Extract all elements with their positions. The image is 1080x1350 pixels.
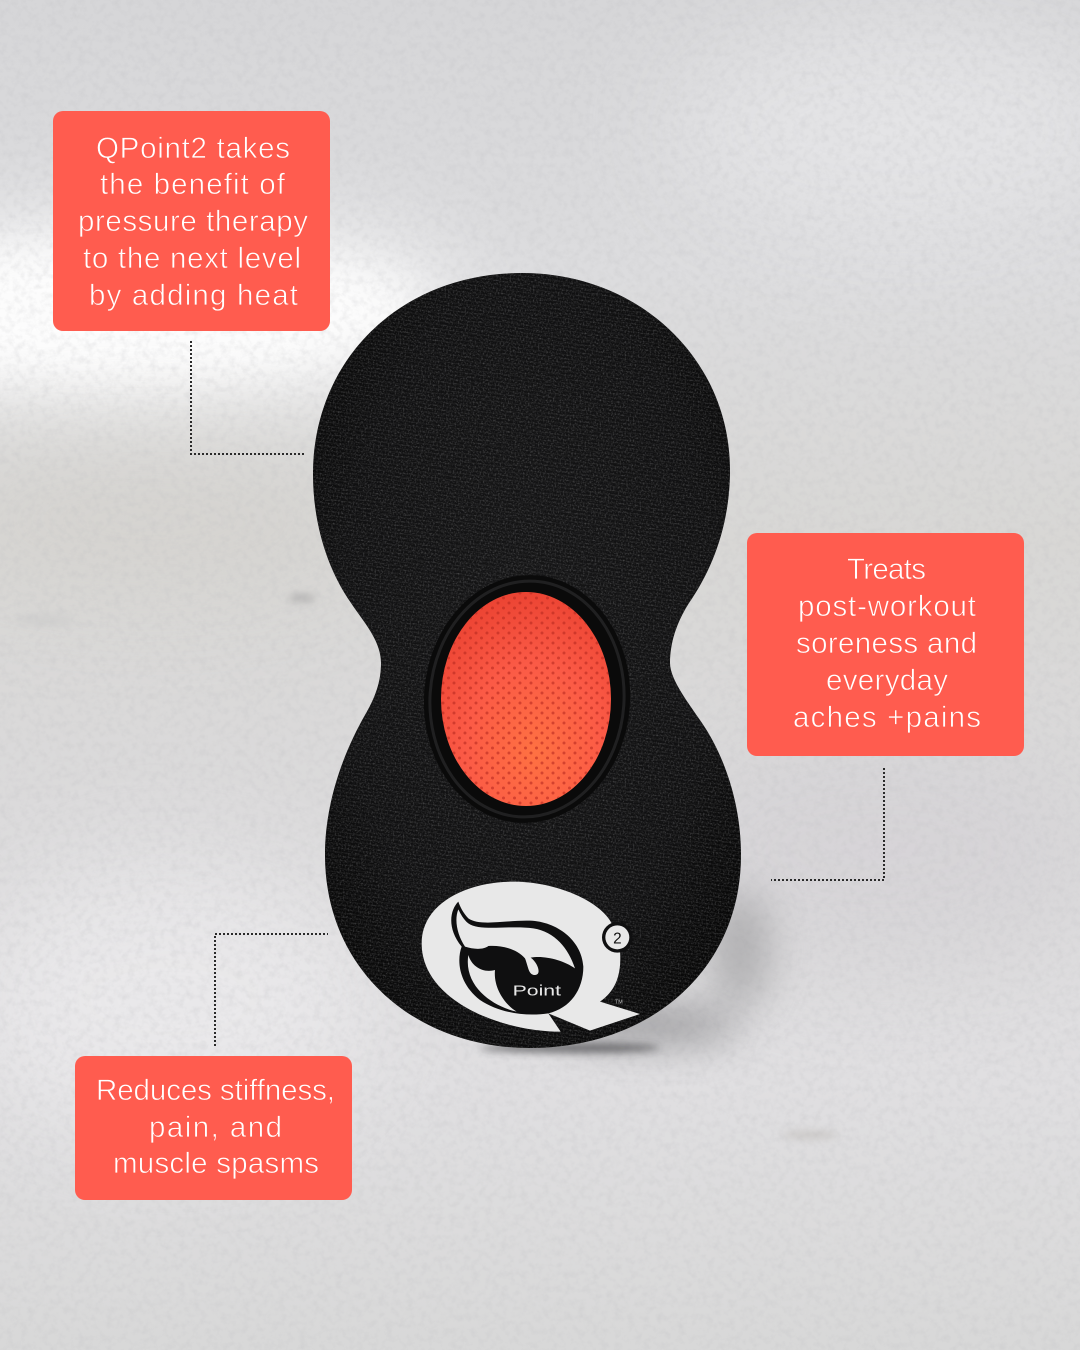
callout: pressure therapy with heat: the benefit of xyxy=(100,168,286,201)
callout: reduces stiffness: muscle spasms xyxy=(113,1147,319,1180)
logo Q shape xyxy=(422,882,640,1032)
callout: treats soreness xyxy=(747,533,1024,756)
connector: right callout to ball xyxy=(771,768,884,880)
callout: treats soreness: Treats xyxy=(847,553,926,586)
product: black peanut massage ball xyxy=(300,260,760,1060)
callout: treats soreness: everyday xyxy=(826,664,948,697)
connector: bottom-left callout to ball xyxy=(215,934,328,1046)
heat pad rim xyxy=(416,568,638,830)
callout: pressure therapy with heat: pressure therapy xyxy=(78,205,308,238)
connector: top-left callout to ball xyxy=(191,341,304,454)
callout: reduces stiffness xyxy=(75,1056,352,1200)
callout: reduces stiffness: pain, and xyxy=(149,1111,282,1144)
callout: treats soreness: aches +pains xyxy=(793,701,981,734)
callout: pressure therapy with heat: by adding heat xyxy=(89,279,298,312)
logo upper flame xyxy=(456,909,575,975)
callout: pressure therapy with heat: QPoint2 takes xyxy=(96,132,290,165)
callout: treats soreness: soreness and xyxy=(796,627,977,660)
QPoint logo xyxy=(422,882,640,1032)
callout: pressure therapy with heat: to the next level xyxy=(83,242,301,275)
logo inner black flame field xyxy=(451,902,583,1015)
callout: reduces stiffness: Reduces stiffness, xyxy=(96,1074,335,1107)
red mesh heat pad xyxy=(441,592,611,806)
ball shadow xyxy=(480,890,770,1053)
logo squared badge: 2 xyxy=(613,930,622,947)
ball body xyxy=(300,260,760,1060)
callout: pressure therapy with heat xyxy=(53,111,330,331)
logo wordmark: Point xyxy=(513,984,561,1000)
callout: treats soreness: post-workout xyxy=(798,590,976,623)
logo trademark: TM xyxy=(615,999,623,1005)
logo squared badge xyxy=(602,922,633,953)
logo lower flame xyxy=(468,955,517,1012)
